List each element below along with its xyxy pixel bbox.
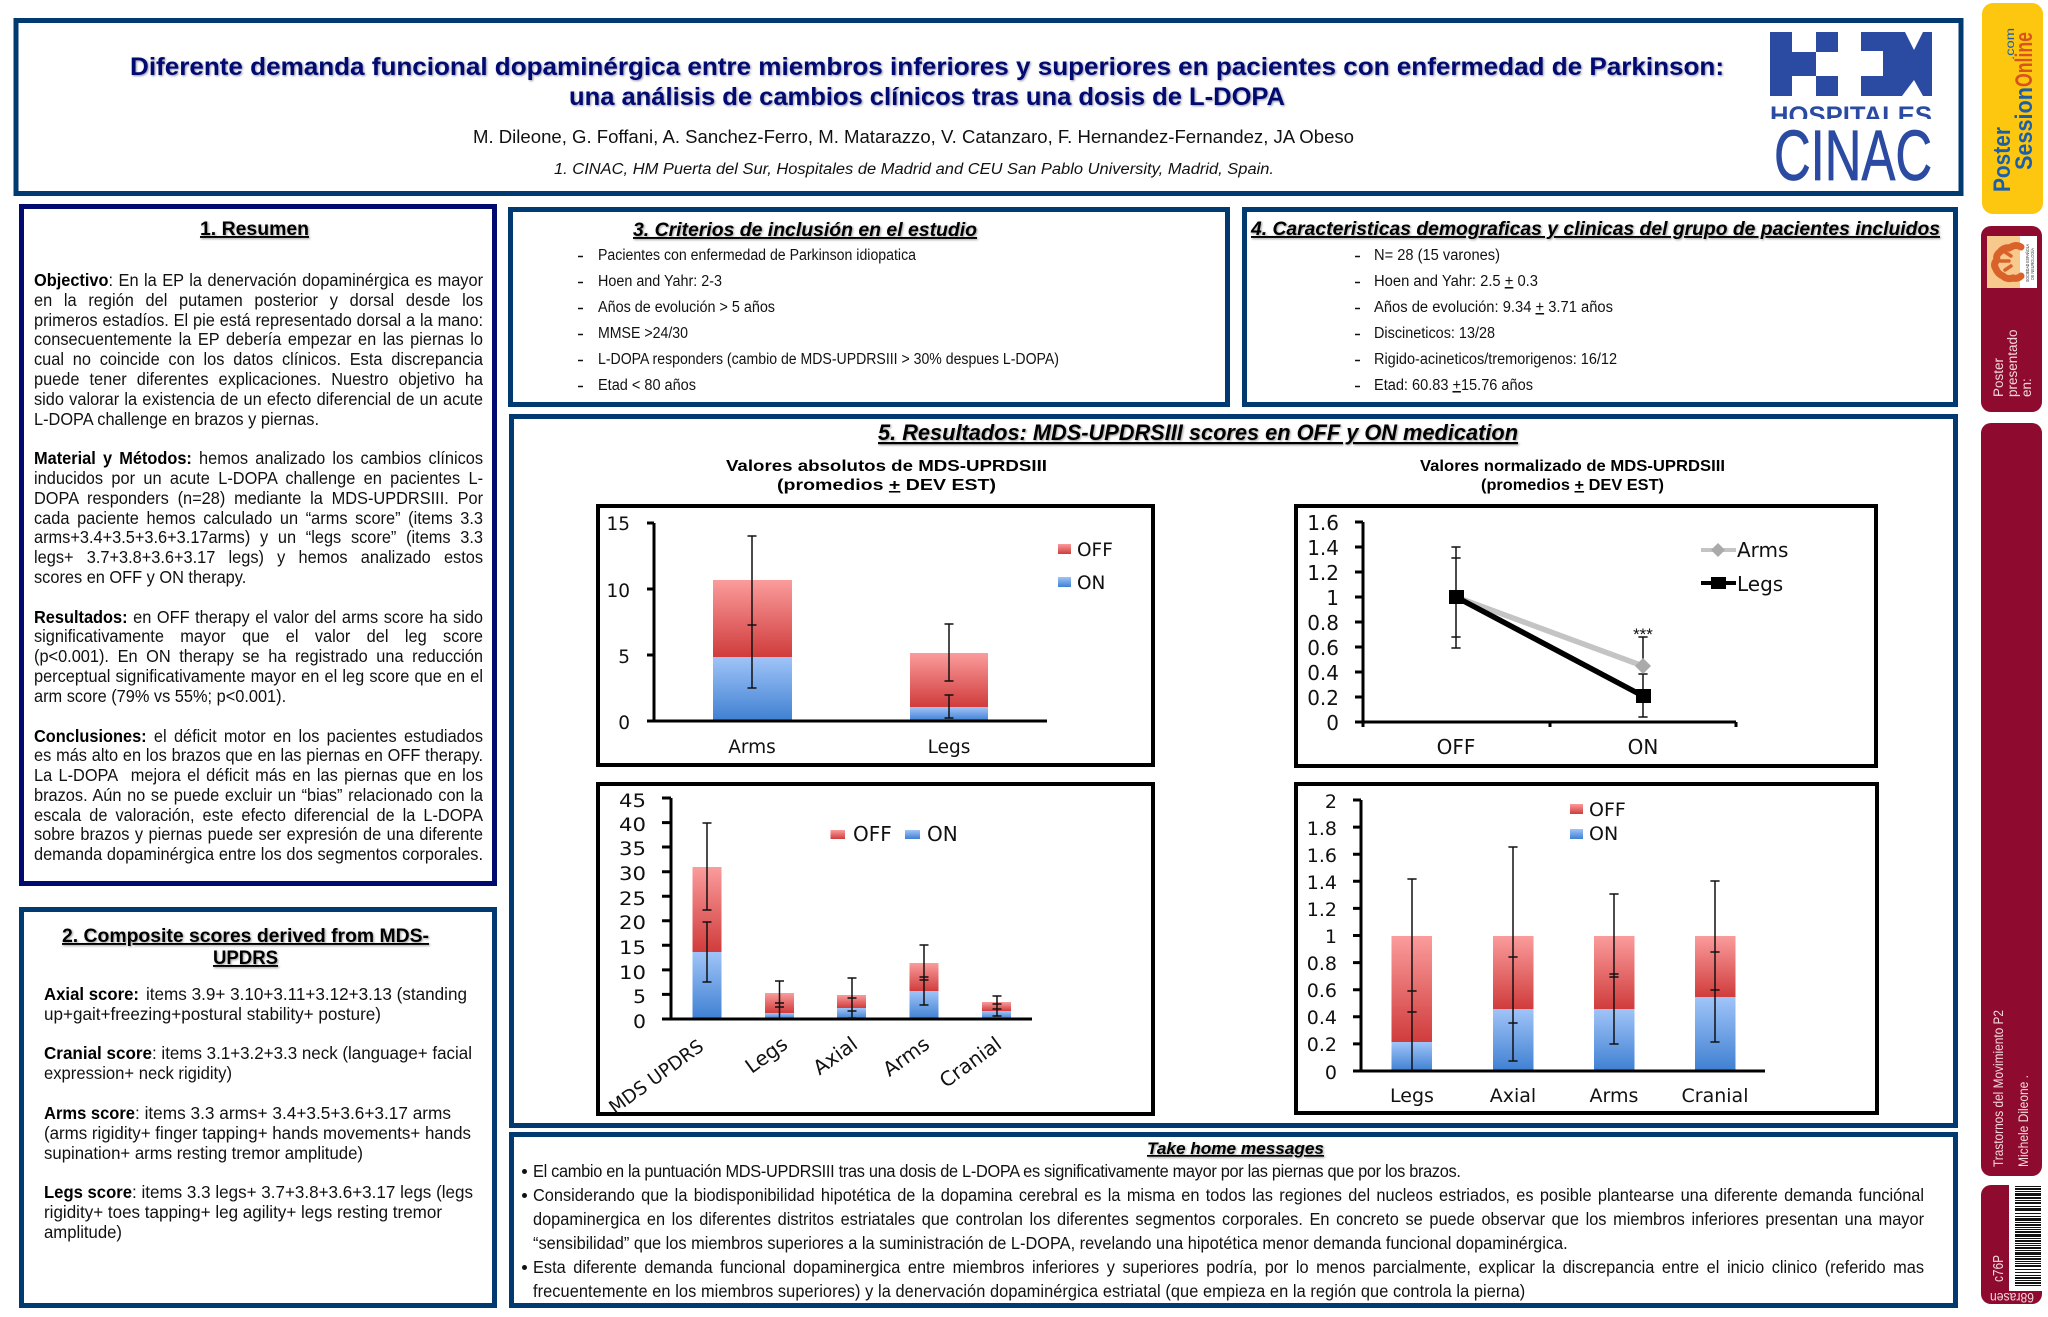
heading: take home messages: Take home messages — [1147, 1139, 1324, 1158]
y axis labels: 35 — [619, 839, 646, 860]
y axis labels: 0.4 — [1307, 661, 1339, 685]
bars: arms and legs — [713, 580, 988, 721]
y axis labels: 0 — [633, 1012, 646, 1033]
x axis labels: Legs — [1390, 1085, 1434, 1107]
text block: messages: “sensibilidad” que los miembros superiores a la suministración de L-DOPA, revelando una hipotética menor demanda funcional dopaminérgica. — [533, 1233, 1568, 1253]
text block: Axial score: Axial score: — [44, 984, 139, 1004]
y axis labels: 1.2 — [1307, 899, 1337, 921]
label: session: Trastornos del Movimiento P2 — [1991, 1010, 2006, 1167]
label: poster presentado en: en: — [2019, 378, 2034, 397]
x axis labels: Arms — [1590, 1085, 1638, 1107]
text block: Objectivo: cual no coincide con los datos clínicos. Esta discrepancia — [34, 349, 483, 369]
list: caracteristicas — [1355, 247, 1617, 394]
heading: Composite scores: 2. Composite scores derived from MDS- — [62, 926, 429, 947]
legend: ON — [927, 822, 958, 846]
legend: OFF — [1589, 799, 1626, 821]
series: legs — [1449, 590, 1651, 703]
y axis labels: 30 — [619, 864, 646, 885]
series: arms — [1456, 597, 1651, 674]
text block: Objectivo — [34, 271, 483, 430]
x axis labels: Axial — [808, 1032, 862, 1080]
text block: Conclusiones — [34, 726, 483, 866]
y axis labels: 1.6 — [1307, 845, 1337, 867]
label: poster presentado en: presentado — [2005, 329, 2020, 397]
text block: messages: dopaminergica en los diferentes distritos estriatales que controlan los diferentes segmentos corporales. En concreto se puede observar que los miembros inferiores presentan una mayor — [533, 1209, 1924, 1229]
text block: messages: Considerando que la biodisponibilidad hipotética de la dopamina cerebral es la misma en todos las regiones del nucleos estriados, es posible plantearse una diferente demanda funciónal — [533, 1185, 1924, 1205]
panel: 5. Resultados — [512, 416, 1956, 1126]
text block: Material y Métodos: inducidos por un acute L-DOPA challenge en pacientes L- — [34, 468, 483, 488]
text block: Conclusiones: escala de valoración, este efecto diferencial de la L-DOPA — [34, 805, 483, 825]
text block: Objectivo: primeros estadíos. El pie está representado dorsal a la mano: — [34, 310, 483, 330]
list: caracteristicas: Hoen and Yahr: 2.5 + 0.3 — [1374, 273, 1538, 290]
subheading: valores absolutos: (promedios + DEV EST) — [777, 477, 996, 494]
significance stars: *** — [1633, 625, 1653, 644]
list: caracteristicas: Rigido-acineticos/tremorigenos: 16/12 — [1374, 351, 1617, 368]
panel: 1. Resumen — [22, 206, 494, 884]
y axis labels: 1.2 — [1307, 561, 1339, 585]
barcode — [2015, 1186, 2041, 1287]
y axis labels: 5 — [633, 987, 646, 1008]
subheading: valores normalizado: (promedios + DEV EST) — [1481, 477, 1664, 494]
list: criterios: Hoen and Yahr: 2-3 — [598, 273, 722, 290]
y axis labels — [606, 514, 630, 734]
logo: HM Hospitales CINAC: HOSPITALES — [1770, 102, 1932, 130]
text block: Resultados: (p<0.001). En ON therapy se ha registrado una reducción — [34, 646, 483, 666]
text block: Arms score: supination+ arms resting tremor amplitude) — [44, 1143, 363, 1163]
y axis labels: 5 — [618, 647, 630, 668]
text block: messages: El cambio en la puntuación MDS-UPDRSIII tras una dosis de L-DOPA es significativamente mayor por las piernas que por los brazos. — [533, 1161, 1461, 1181]
text block: messages: Esta diferente demanda funcional dopaminergica entre miembros inferiores y superiores podría, por lo menos parcialmente, explicar la discrepancia entre el inicio clinico (referido mas — [533, 1257, 1924, 1277]
list: caracteristicas: Discineticos: 13/28 — [1374, 325, 1495, 342]
y axis labels: 0.8 — [1307, 953, 1337, 975]
y axis labels: 1.8 — [1307, 818, 1337, 840]
legend — [1058, 540, 1113, 594]
y axis labels — [1307, 791, 1337, 1084]
list: criterios: Pacientes con enfermedad de Parkinson idiopatica — [598, 247, 916, 264]
panel: 3. Criterios de inclusión — [510, 210, 1228, 404]
heading: Caracteristicas demograficas: 4. Caracteristicas demograficas y clinicas del grupo de pacientes incluidos — [1250, 219, 1940, 240]
list: caracteristicas: Años de evolución: 9.34 + 3.71 años — [1374, 299, 1613, 316]
heading: Composite scores — [62, 926, 429, 969]
error bars — [1451, 547, 1648, 717]
text block: Resultados: perceptual significativamente mayor en el leg score que en el — [34, 666, 483, 686]
text block: Conclusiones: demanda dopaminérgica entre los dos segmentos corporales. — [34, 844, 483, 864]
legend — [1570, 799, 1626, 845]
legend: ON — [1589, 823, 1618, 845]
sidebar: poster code and barcode — [1981, 1185, 2043, 1306]
sidebar: PosterSessionOnline badge: Poster — [1989, 127, 2016, 192]
text block: Legs score — [44, 1182, 473, 1242]
x axis labels: Legs — [928, 737, 970, 758]
sidebar: PosterSessionOnline badge — [1982, 3, 2043, 214]
text block: Legs score: : items 3.3 legs+ 3.7+3.8+3.6+3.17 legs (legs — [132, 1182, 473, 1202]
y axis labels: 1 — [1325, 926, 1337, 948]
x axis labels: Legs — [740, 1032, 792, 1078]
text block: Conclusiones: sobre brazos y piernas puede ser expresión de una diferente — [34, 824, 483, 844]
text block: Cranial score: expression+ neck rigidity) — [44, 1063, 232, 1083]
text block: Resultados: Resultados: en OFF therapy el valor del arms score ha sido — [34, 607, 483, 627]
text block: Material y Métodos: cada paciente hemos calculado un “arms score” (items 3.3 — [34, 508, 483, 528]
icon: society logo brain: SOCIEDAD ESPAÑOLA — [2024, 244, 2030, 282]
text block: messages — [533, 1159, 1924, 1303]
y axis labels: 0 — [1326, 711, 1339, 735]
sidebar: PosterSessionOnline badge: .com — [2003, 28, 2017, 60]
sidebar: session and author card — [1981, 423, 2042, 1176]
list: caracteristicas: N= 28 (15 varones) — [1374, 247, 1500, 264]
text block: Material y Métodos: arms+3.4+3.5+3.6+3.17arms) y un “legs score” (items 3.3 — [34, 527, 483, 547]
text block: Resultados — [34, 608, 483, 707]
y axis labels: 0 — [1325, 1062, 1337, 1084]
y axis labels: 0.2 — [1307, 1034, 1337, 1056]
text block: Conclusiones: es más alto en los brazos que en las piernas en OFF therapy. — [34, 745, 483, 765]
title: Diferente demanda funcional dopaminérgica entre miembros inferiores y superiores en pacientes con enfermedad de Parkinson: — [130, 53, 1724, 81]
text block: Objectivo: Objectivo: En la EP la denervación dopaminérgica es mayor — [34, 270, 483, 290]
y axis labels: 1.4 — [1307, 536, 1339, 560]
heading: Criterios de inclusión: 3. Criterios de inclusión en el estudio — [633, 220, 977, 241]
legend: Legs — [1737, 572, 1783, 596]
label: poster presentado en — [1991, 329, 2034, 397]
text block: Axial score — [44, 984, 467, 1024]
label: upside-down code: 68rasen — [1990, 1290, 2034, 1306]
text block: Resultados: significativamente mayor que el valor del leg score — [34, 626, 483, 646]
text block: Objectivo: sido valorar la existencia de un efecto diferencial de un acute — [34, 389, 483, 409]
x axis labels: Arms — [878, 1032, 934, 1081]
title — [130, 53, 1724, 111]
x axis labels — [605, 1032, 1006, 1119]
y axis labels: 0.6 — [1307, 636, 1339, 660]
text block: Conclusiones: Conclusiones: el déficit motor en los pacientes estudiados — [34, 726, 483, 746]
logo: HM Hospitales CINAC — [1770, 32, 1932, 196]
y axis labels: 10 — [606, 581, 630, 602]
y axis labels: 15 — [606, 514, 630, 535]
text block: Material y Métodos: DOPA responders (n=28) mediante la MDS-UPDRSIII. Por — [34, 488, 483, 508]
sidebar: poster presentado card — [1981, 226, 2042, 412]
bars — [692, 867, 1011, 1019]
subheading: valores normalizado: Valores normalizado de MDS-UPRDSIII — [1420, 458, 1725, 475]
y axis labels: 1.4 — [1307, 872, 1337, 894]
text block: Legs score: amplitude) — [44, 1222, 122, 1242]
icon: society logo brain: DE NEUROLOGÍA — [2029, 248, 2035, 280]
subheading: valores normalizado — [1420, 458, 1725, 494]
text block: messages: frecuentemente en los miembros superiores) y la denervación dopaminérgica estriatal (que empieza en la región que controla la pierna) — [533, 1281, 1525, 1301]
subheading: valores absolutos: Valores absolutos de MDS-UPRDSIII — [726, 458, 1047, 475]
x axis labels: MDS UPDRS — [605, 1036, 708, 1119]
sidebar: PosterSessionOnline badge: Online — [2011, 32, 2038, 87]
authors: M. Dileone, G. Foffani, A. Sanchez-Ferro, M. Matarazzo, V. Catanzaro, F. Hernandez-Fernandez, JA Obeso — [473, 127, 1354, 147]
label: poster code: c76P — [1990, 1255, 2007, 1282]
x axis labels — [728, 737, 970, 758]
text block: Cranial score: Cranial score — [44, 1043, 152, 1063]
text block: Axial score: up+gait+freezing+postural stability+ posture) — [44, 1004, 381, 1024]
sidebar: PosterSessionOnline badge: Session — [2011, 87, 2038, 170]
y axis labels: 25 — [619, 889, 646, 910]
y axis labels: 0 — [618, 713, 630, 734]
text block: Objectivo: consecuentemente la EP debería empezar en las piernas lo — [34, 329, 483, 349]
list: criterios: L-DOPA responders (cambio de MDS-UPDRSIII > 30% despues L-DOPA) — [598, 351, 1059, 368]
x axis labels — [1437, 735, 1658, 759]
x axis labels: Cranial — [935, 1032, 1006, 1092]
bar chart: absolute all scores — [598, 784, 1153, 1119]
logo: HM Hospitales CINAC: CINAC — [1774, 117, 1932, 196]
x axis labels: Axial — [1490, 1085, 1536, 1107]
legend: OFF — [853, 822, 892, 846]
legend — [830, 822, 958, 846]
text block: Legs score: Legs score — [44, 1182, 132, 1202]
text block: Objectivo: en la región del putamen posterior y dorsal desde los — [34, 290, 483, 310]
panel: 2. Composite scores — [22, 910, 494, 1306]
heading: Composite scores: UPDRS — [213, 948, 278, 969]
text block: Resultados: arm score (79% vs 55%; p<0.001). — [34, 686, 286, 706]
x axis labels: ON — [1628, 735, 1658, 759]
y axis labels: 40 — [619, 815, 646, 836]
text block: Arms score — [44, 1103, 471, 1163]
bars — [1392, 936, 1736, 1071]
text block: Axial score: items 3.9+ 3.10+3.11+3.12+3.13 (standing — [146, 984, 467, 1004]
list: caracteristicas: Etad: 60.83 +15.76 años — [1374, 377, 1533, 394]
label: author: Michele Dileone . — [2016, 1075, 2031, 1167]
heading: Resumen: 1. Resumen — [200, 219, 309, 240]
bar chart: normalized all scores — [1296, 784, 1877, 1113]
y axis labels — [1307, 511, 1339, 735]
text block: Material y Métodos — [34, 449, 483, 588]
text block: Material y Métodos: scores en OFF y ON therapy. — [34, 567, 246, 587]
text block: Material y Métodos: Material y Métodos: hemos analizado los cambios clínicos — [34, 448, 483, 468]
text block: Legs score: rigidity+ toes tapping+ leg agility+ legs resting tremor — [44, 1202, 442, 1222]
bullets — [522, 1169, 527, 1270]
y axis labels: 45 — [619, 791, 646, 812]
y axis labels: 15 — [619, 938, 646, 959]
text block: Conclusiones: brazos. Aún no se puede excluir un “bias” relacionado con la — [34, 785, 483, 805]
text block: Objectivo: puede tener diferentes explicaciones. Nuestro objetivo ha — [34, 369, 483, 389]
legend: ON — [1077, 573, 1105, 594]
y axis labels: 0.2 — [1307, 686, 1339, 710]
list: criterios — [578, 247, 1059, 394]
text block: Arms score: (arms rigidity+ finger tapping+ hands movements+ hands — [44, 1123, 471, 1143]
line chart: normalized arms and legs — [1296, 506, 1876, 766]
y axis labels: 1 — [1326, 586, 1339, 610]
subheading: valores absolutos — [726, 458, 1047, 494]
list: criterios: MMSE >24/30 — [598, 325, 688, 342]
text block: Cranial score: : items 3.1+3.2+3.3 neck (language+ facial — [152, 1043, 472, 1063]
y axis labels: 1.6 — [1307, 511, 1339, 535]
y axis labels: 20 — [619, 913, 646, 934]
title: una análisis de cambios clínicos tras una dosis de L-DOPA — [569, 83, 1285, 111]
error bars — [1407, 847, 1720, 1071]
error bars — [702, 823, 1002, 1019]
text block: Arms score: Arms score — [44, 1103, 135, 1123]
panel: title header — [16, 20, 1961, 196]
text block: Conclusiones: La L-DOPA mejora el déficit más en las piernas que en los — [34, 765, 483, 785]
icon: society logo brain — [1987, 236, 2037, 288]
panel: 4. Caracteristicas demograficas — [1244, 210, 1956, 404]
x axis labels — [1390, 1085, 1748, 1107]
y axis labels: 0.4 — [1307, 1007, 1337, 1029]
legend: OFF — [1077, 540, 1113, 561]
error bars — [748, 536, 954, 718]
heading: Resultados: 5. Resultados: MDS-UPDRSIII scores en OFF y ON medication — [878, 420, 1518, 445]
legend: Arms — [1737, 538, 1788, 562]
legend — [1701, 538, 1788, 596]
list: criterios: Años de evolución > 5 años — [598, 299, 775, 316]
text block: Objectivo: L-DOPA challenge en brazos y piernas. — [34, 409, 319, 429]
y axis labels — [619, 791, 646, 1033]
panel: take home messages — [512, 1134, 1956, 1306]
text block: Arms score: : items 3.3 arms+ 3.4+3.5+3.6+3.17 arms — [135, 1103, 451, 1123]
label: poster presentado en: Poster — [1991, 357, 2006, 397]
x axis labels: OFF — [1437, 735, 1475, 759]
text block: Material y Métodos: legs+ 3.7+3.8+3.6+3.17 legs) y hemos analizado estos — [34, 547, 483, 567]
x axis labels: Arms — [728, 737, 776, 758]
y axis labels: 10 — [619, 963, 646, 984]
x axis labels: Cranial — [1682, 1085, 1748, 1107]
affiliation: 1. CINAC, HM Puerta del Sur, Hospitales de Madrid and CEU San Pablo University, Madrid, Spain. — [554, 161, 1274, 178]
text block: Cranial score — [44, 1043, 472, 1083]
y axis labels: 0.8 — [1307, 611, 1339, 635]
y axis labels: 0.6 — [1307, 980, 1337, 1002]
y axis labels: 2 — [1325, 791, 1337, 813]
list: criterios: Etad < 80 años — [598, 377, 696, 394]
bar chart: absolute arms and legs — [598, 506, 1153, 765]
